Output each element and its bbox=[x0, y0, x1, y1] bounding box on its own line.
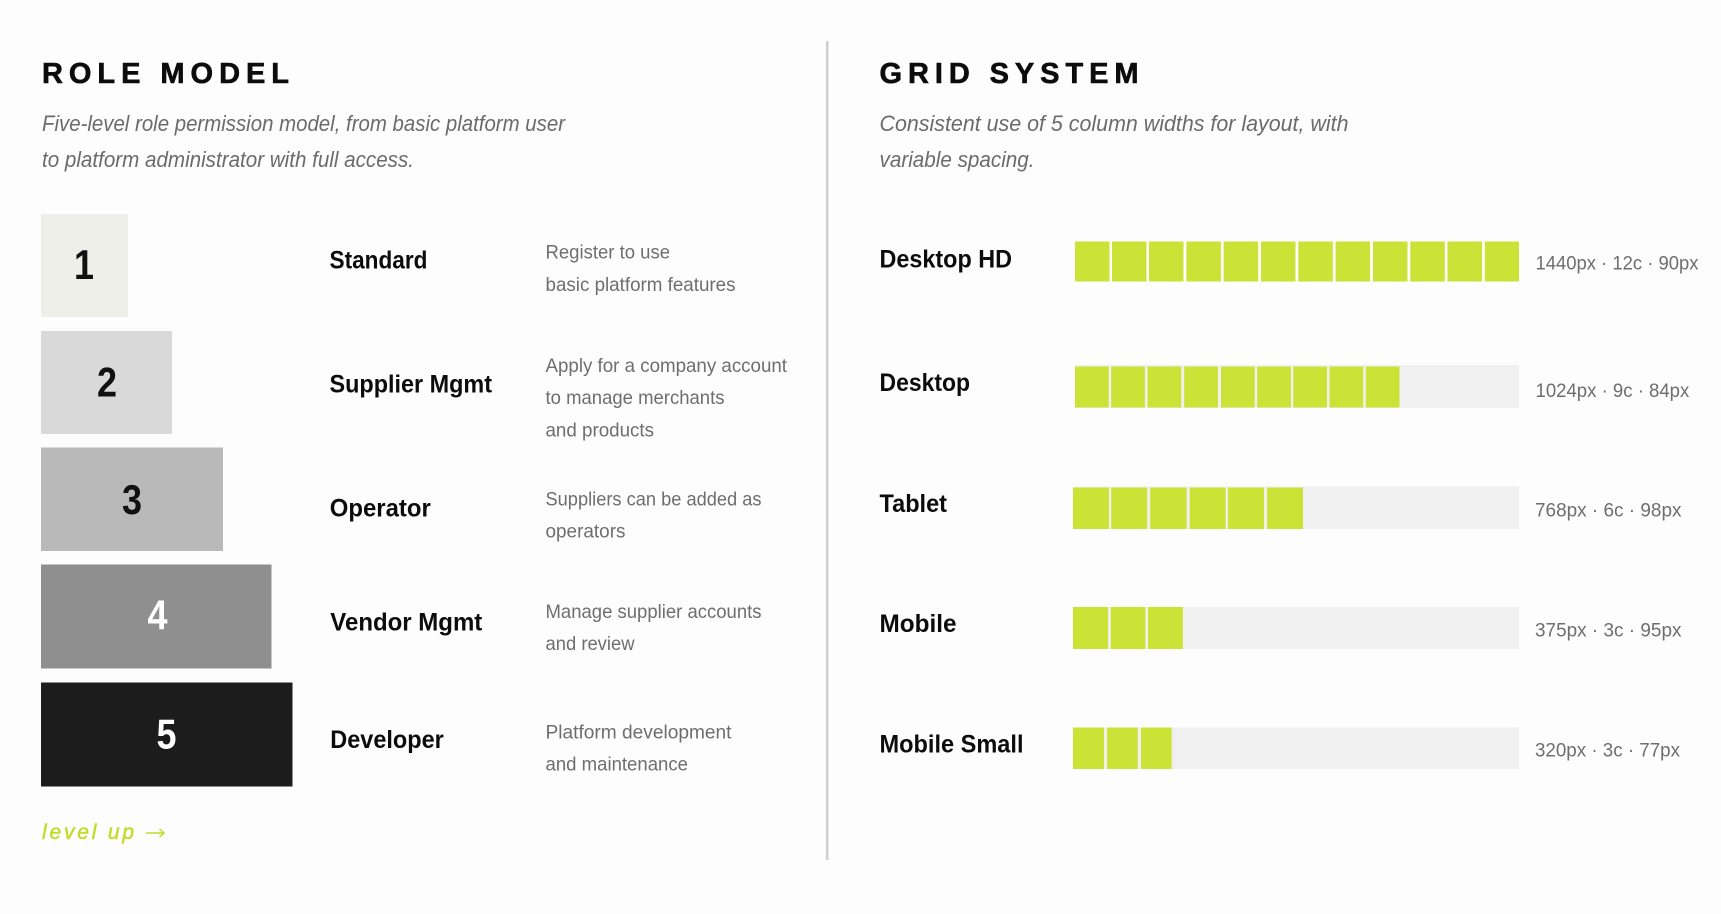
panel: role model bbox=[41, 58, 788, 844]
role row: level 5 Developer: and maintenance bbox=[546, 754, 688, 776]
subtitle: grid system bbox=[880, 111, 1348, 172]
grid row: Desktop HD: Desktop HD bbox=[880, 246, 1012, 274]
subtitle: role model: Five-level role permission model, from basic platform user bbox=[42, 111, 567, 136]
role row: level 1 Standard bbox=[41, 214, 736, 317]
role row: level 5 Developer: Developer bbox=[330, 726, 444, 754]
grid row: Desktop: Desktop bbox=[880, 369, 970, 397]
grid row: Desktop HD bbox=[880, 242, 1699, 282]
subtitle: role model: to platform administrator with full access. bbox=[42, 147, 414, 172]
grid row: Desktop HD: 1440px · 12c · 90px bbox=[1536, 252, 1699, 274]
grid row: Mobile Small: 320px · 3c · 77px bbox=[1535, 740, 1680, 762]
role row: level 4 Vendor Mgmt: 4 bbox=[148, 592, 168, 638]
role row: level 4 Vendor Mgmt: Manage supplier accounts bbox=[546, 601, 762, 623]
role row: level 4 Vendor Mgmt: and review bbox=[546, 633, 635, 655]
heading: role model: ROLE MODEL bbox=[42, 58, 289, 90]
role row: level 2 Supplier Mgmt: Supplier Mgmt bbox=[330, 370, 493, 398]
grid row: Desktop bbox=[880, 365, 1690, 408]
grid row: Tablet: 768px · 6c · 98px bbox=[1535, 500, 1682, 522]
role row: level 2 Supplier Mgmt bbox=[41, 331, 788, 442]
subtitle: role model bbox=[42, 111, 567, 172]
grid row: Desktop: 1024px · 9c · 84px bbox=[1536, 380, 1690, 402]
grid row: Mobile Small: Mobile Small bbox=[880, 730, 1024, 758]
label: level up with arrow: level up bbox=[42, 821, 134, 844]
grid row: Tablet: Tablet bbox=[880, 490, 948, 518]
role row: level 3 Operator bbox=[41, 448, 762, 551]
role row: level 4 Vendor Mgmt bbox=[41, 564, 762, 668]
role row: level 2 Supplier Mgmt: to manage merchants bbox=[546, 387, 725, 409]
role row: level 1 Standard: basic platform features bbox=[546, 274, 736, 296]
subtitle: grid system: variable spacing. bbox=[880, 147, 1034, 172]
role row: level 3 Operator: operators bbox=[546, 520, 626, 542]
grid row: Tablet bbox=[880, 486, 1682, 529]
grid row: Mobile bbox=[880, 607, 1682, 649]
role row: level 1 Standard: Register to use bbox=[546, 242, 670, 264]
grid row: Mobile: 375px · 3c · 95px bbox=[1535, 620, 1682, 642]
role row: level 5 Developer: 5 bbox=[156, 710, 176, 758]
role row: level 5 Developer: Platform development bbox=[546, 722, 732, 744]
role row: level 4 Vendor Mgmt: Vendor Mgmt bbox=[330, 608, 483, 636]
role row: level 3 Operator: Operator bbox=[330, 494, 431, 522]
panel: grid system bbox=[880, 58, 1699, 769]
role row: level 1 Standard: 1 bbox=[74, 241, 94, 288]
role row: level 5 Developer bbox=[41, 682, 732, 786]
grid row: Mobile Small bbox=[880, 728, 1680, 769]
role row: level 3 Operator: Suppliers can be added as bbox=[546, 488, 762, 510]
role row: level 2 Supplier Mgmt: 2 bbox=[97, 358, 117, 406]
role row: level 1 Standard: Standard bbox=[330, 246, 428, 274]
grid row: Mobile: Mobile bbox=[880, 610, 957, 638]
subtitle: grid system: Consistent use of 5 column widths for layout, with bbox=[880, 111, 1348, 136]
role row: level 2 Supplier Mgmt: Apply for a company account bbox=[546, 355, 788, 377]
heading: grid system: GRID SYSTEM bbox=[880, 58, 1138, 90]
role row: level 2 Supplier Mgmt: and products bbox=[546, 420, 654, 442]
role row: level 3 Operator: 3 bbox=[122, 476, 142, 523]
